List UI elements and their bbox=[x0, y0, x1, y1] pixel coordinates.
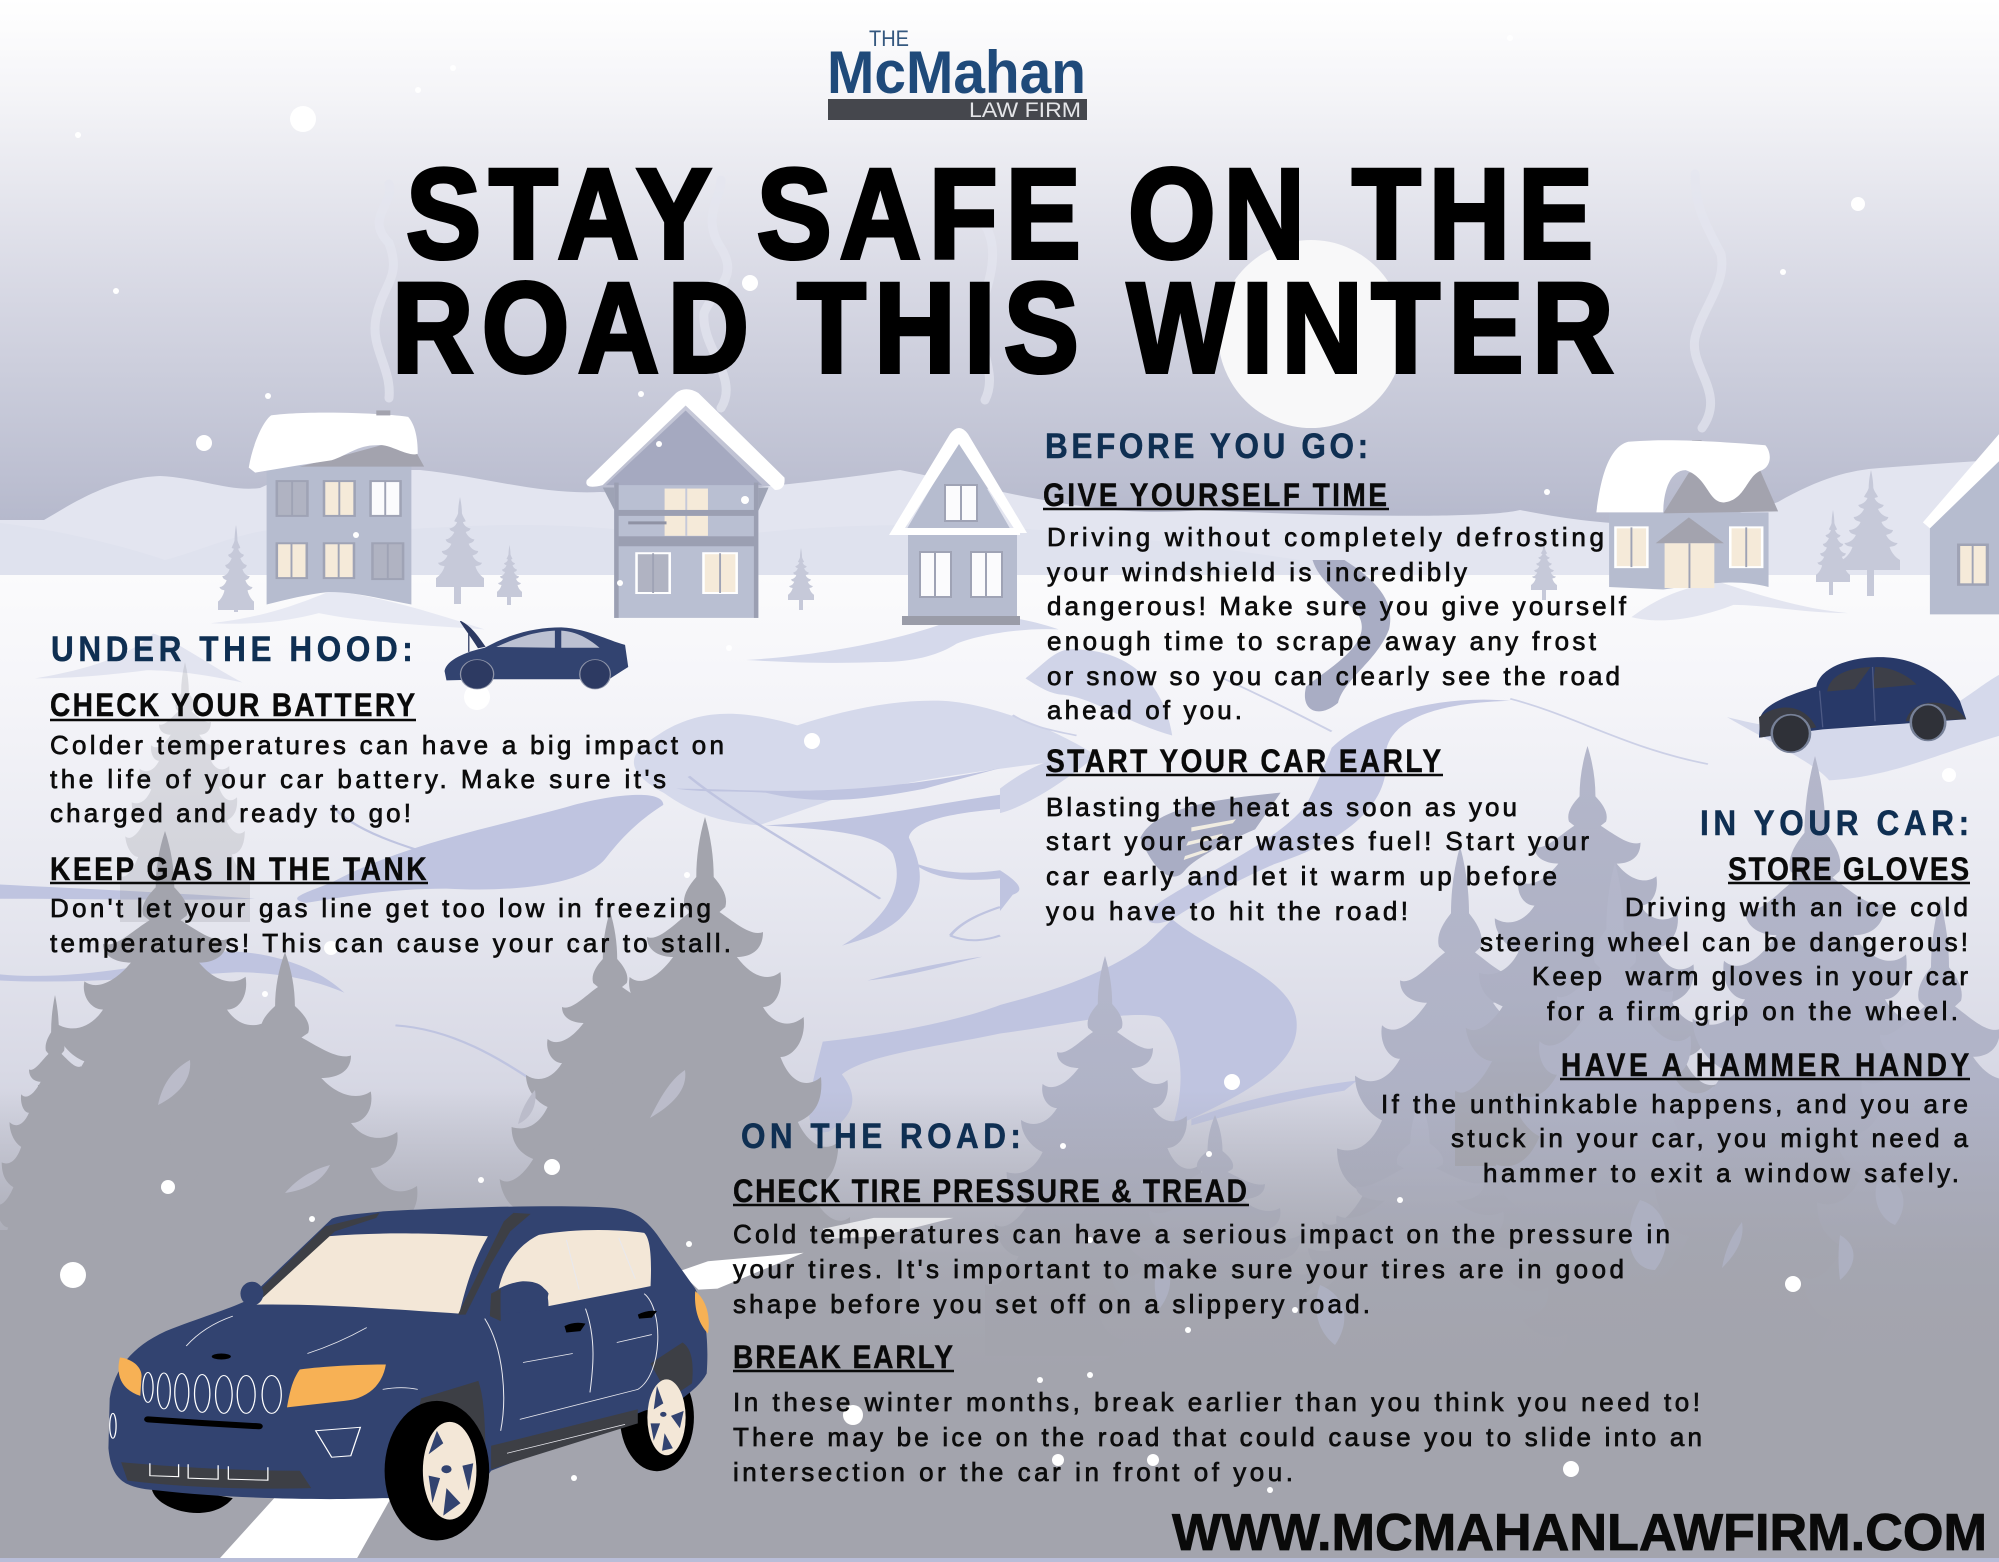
text: break early bbox=[733, 1387, 1702, 1487]
title: ROAD THIS WINTER bbox=[392, 256, 1613, 400]
text: give yourself time bbox=[1047, 522, 1627, 725]
rear wheel rim bbox=[647, 1379, 686, 1455]
heading: BEFORE YOU GO: bbox=[1045, 428, 1368, 466]
text: give yourself time: Driving without completely defrosting bbox=[1047, 522, 1604, 552]
website url: WWW.MCMAHANLAWFIRM.COM bbox=[1172, 1504, 1987, 1562]
subheading: check your battery: CHECK YOUR BATTERY bbox=[50, 688, 415, 723]
icon: car with open hood bbox=[445, 621, 628, 689]
heading: ON THE ROAD: bbox=[741, 1118, 1021, 1156]
pillars bbox=[121, 1213, 693, 1498]
text: start your car early: you have to hit the road! bbox=[1046, 896, 1408, 926]
windshield bbox=[255, 1233, 488, 1314]
subheading: keep gas in the tank: KEEP GAS IN THE TANK bbox=[50, 852, 427, 887]
text: break early: In these winter months, break earlier than you think you need to! bbox=[733, 1387, 1700, 1417]
house: snow-covered block bbox=[249, 410, 424, 604]
panel: in your car bbox=[1381, 805, 1970, 1188]
heading: UNDER THE HOOD: bbox=[51, 631, 413, 669]
subheading: tires: CHECK TIRE PRESSURE & TREAD bbox=[733, 1174, 1247, 1209]
snow drifts and swirling road (right) bbox=[1000, 560, 1999, 1127]
text: gas bbox=[50, 893, 731, 958]
text: battery: Colder temperatures can have a big impact on bbox=[50, 730, 724, 760]
winter sky background bbox=[0, 0, 1999, 600]
text: gloves: steering wheel can be dangerous! bbox=[1480, 927, 1968, 957]
text: gloves: Driving with an ice cold bbox=[1625, 892, 1968, 922]
text: give yourself time: ahead of you. bbox=[1047, 695, 1242, 725]
house: small gabled bbox=[889, 428, 1027, 625]
text: hammer: stuck in your car, you might need a bbox=[1451, 1123, 1969, 1153]
text: give yourself time: or snow so you can clearly see the road bbox=[1047, 661, 1620, 691]
text: hammer: If the unthinkable happens, and you are bbox=[1381, 1089, 1968, 1119]
text: give yourself time: enough time to scrape away any frost bbox=[1047, 626, 1597, 656]
pine tree silhouettes, right bbox=[985, 746, 1999, 1460]
text: gloves: Keep warm gloves in your car bbox=[1532, 961, 1968, 991]
house: snow-roof cottage bbox=[1596, 440, 1778, 590]
headlights bbox=[119, 1291, 709, 1407]
text: battery bbox=[50, 730, 724, 828]
logo bbox=[827, 26, 1087, 122]
text: tires: shape before you set off on a slippery road. bbox=[733, 1289, 1370, 1319]
logo: law firm: LAW FIRM bbox=[969, 99, 1081, 122]
text: start your car early: start your car wastes fuel! Start your bbox=[1046, 826, 1589, 856]
text: gas: Don't let your gas line get too low in freezing bbox=[50, 893, 711, 923]
bottom edge strip bbox=[0, 1558, 1999, 1562]
road markings bbox=[220, 1218, 954, 1558]
subheading: give yourself time: GIVE YOURSELF TIME bbox=[1043, 478, 1387, 513]
logo: bar bbox=[828, 99, 1087, 120]
text: hammer: hammer to exit a window safely. bbox=[1483, 1158, 1959, 1188]
rear wheel bbox=[620, 1363, 694, 1471]
door handles and hood logo bbox=[564, 1311, 657, 1333]
snow drifts and swirling road (left) bbox=[0, 591, 1097, 1132]
text: gloves: for a firm grip on the wheel. bbox=[1547, 996, 1958, 1026]
text: break early: There may be ice on the road that could cause you to slide into an bbox=[733, 1422, 1702, 1452]
snowy ground bbox=[0, 575, 1999, 1562]
title bbox=[392, 142, 1613, 400]
illustration: large blue SUV bbox=[108, 1206, 709, 1541]
subheading: store gloves: STORE GLOVES bbox=[1728, 852, 1969, 887]
panel: on the road bbox=[733, 1118, 1702, 1487]
text: battery: the life of your car battery. Make sure it's bbox=[50, 764, 666, 794]
moon bbox=[1218, 240, 1404, 428]
front wheel bbox=[385, 1401, 489, 1541]
snowy hills bbox=[0, 460, 1999, 600]
pale snow patches on trees bbox=[158, 1060, 1903, 1345]
subheading: hammer: HAVE A HAMMER HANDY bbox=[1561, 1048, 1969, 1083]
house: right edge bbox=[1923, 433, 1999, 614]
text: gloves bbox=[1480, 892, 1968, 1026]
logo: McMahan: McMahan bbox=[827, 39, 1086, 106]
text: give yourself time: dangerous! Make sure you give yourself bbox=[1047, 591, 1627, 621]
body lines bbox=[186, 1238, 658, 1453]
panel: before you go bbox=[1043, 428, 1627, 926]
subheading: start your car early: START YOUR CAR EARLY bbox=[1046, 744, 1441, 779]
side windows bbox=[499, 1230, 651, 1306]
distant small trees bbox=[218, 470, 1900, 612]
side mirrors bbox=[501, 1284, 549, 1315]
bumper bar bbox=[148, 1419, 259, 1426]
text: tires: your tires. It's important to make sure your tires are in good bbox=[733, 1254, 1624, 1284]
pine tree silhouettes, left bbox=[0, 662, 900, 1562]
title: STAY SAFE ON THE bbox=[406, 142, 1593, 286]
text: tires bbox=[733, 1219, 1670, 1319]
text: break early: intersection or the car in front of you. bbox=[733, 1457, 1293, 1487]
panel: under the hood bbox=[50, 631, 731, 958]
text: hammer bbox=[1381, 1089, 1969, 1188]
heading: IN YOUR CAR: bbox=[1700, 805, 1969, 843]
text: gas: temperatures! This can cause your car to stall. bbox=[50, 928, 731, 958]
far front tyre bbox=[152, 1489, 233, 1513]
text: tires: Cold temperatures can have a serious impact on the pressure in bbox=[733, 1219, 1670, 1249]
logo: the: THE bbox=[869, 26, 909, 51]
subheading: break early: BREAK EARLY bbox=[733, 1340, 953, 1375]
text: start your car early bbox=[1046, 792, 1589, 926]
text: battery: charged and ready to go! bbox=[50, 798, 411, 828]
house: A-frame with balcony bbox=[586, 389, 785, 618]
grille bbox=[110, 1372, 360, 1480]
icon: blue beetle car bbox=[1759, 657, 1966, 752]
text: start your car early: Blasting the heat as soon as you bbox=[1046, 792, 1517, 822]
chimney smoke wisps bbox=[375, 174, 1722, 428]
text: give yourself time: your windshield is incredibly bbox=[1047, 557, 1467, 587]
ground haze over lower scene bbox=[0, 1090, 1999, 1562]
text: start your car early: car early and let it warm up before bbox=[1046, 861, 1557, 891]
body bbox=[108, 1206, 707, 1499]
